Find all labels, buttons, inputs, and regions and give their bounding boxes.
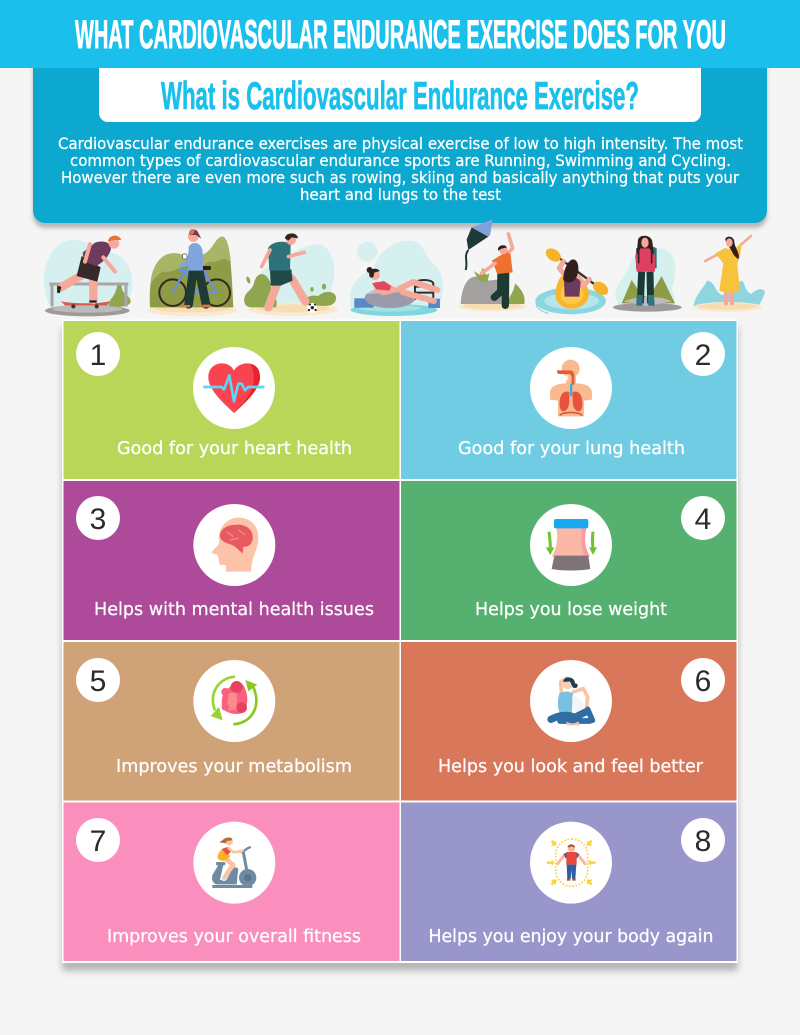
definition text: heart and lungs to the test (300, 186, 501, 204)
icon: waist (530, 504, 612, 586)
panel: definition (33, 60, 767, 223)
label: Good for your heart health (117, 438, 352, 459)
icon: lungs (530, 347, 612, 429)
number 5: 5 (90, 665, 106, 698)
number 4: 4 (695, 503, 711, 536)
icon: heart (193, 347, 275, 429)
illustration: dancer on beach (693, 236, 765, 312)
definition text: However there are even more such as rowing, skiing and basically anything that puts your (61, 169, 740, 187)
icon: body awareness (530, 822, 612, 904)
card 4 (401, 481, 736, 640)
number 5 (76, 658, 120, 702)
label: Helps you lose weight (475, 599, 667, 620)
icon: brain (193, 504, 275, 586)
number 3 (76, 496, 120, 540)
definition text: Cardiovascular endurance exercises are physical exercise of low to high intensity. The most (58, 135, 743, 153)
icon: yoga (530, 660, 612, 742)
illustration: kite flyer (458, 219, 526, 311)
number 7: 7 (90, 825, 106, 858)
card 5 (64, 642, 400, 800)
illustration: skateboarder (44, 236, 132, 316)
number 6: 6 (695, 665, 711, 698)
label: Helps you look and feel better (438, 756, 704, 777)
definition text: common types of cardiovascular endurance sports are Running, Swimming and Cycling. (70, 152, 731, 170)
benefits grid (62, 320, 738, 963)
card 1 (64, 321, 400, 479)
illustration: cyclist (147, 229, 237, 316)
illustration: kayaker (535, 246, 611, 314)
number 6 (681, 658, 725, 702)
number 8: 8 (695, 825, 711, 858)
number 2 (681, 332, 725, 376)
number 2: 2 (695, 339, 711, 372)
label: Good for your lung health (458, 438, 685, 459)
icon: metabolism (193, 660, 275, 742)
icon: exercise bike (193, 822, 275, 904)
label: Helps with mental health issues (94, 599, 374, 620)
number 8 (681, 818, 725, 862)
card 3 (64, 481, 400, 640)
card 2 (401, 321, 736, 479)
number 3: 3 (90, 503, 106, 536)
illustration: lounging in pool (350, 241, 443, 316)
subtitle box (99, 60, 701, 122)
label: Improves your overall fitness (107, 926, 361, 947)
illustration: hiker (613, 236, 682, 312)
label: Improves your metabolism (116, 756, 352, 777)
header banner (0, 0, 800, 68)
illustration: soccer player (244, 233, 338, 316)
label: Helps you enjoy your body again (428, 926, 714, 947)
number 7 (76, 818, 120, 862)
number 1 (76, 332, 120, 376)
definition text (58, 135, 743, 204)
card 7 (64, 802, 400, 961)
number 4 (681, 496, 725, 540)
card 6 (401, 642, 736, 800)
card 8 (401, 802, 736, 961)
number 1: 1 (90, 339, 106, 372)
